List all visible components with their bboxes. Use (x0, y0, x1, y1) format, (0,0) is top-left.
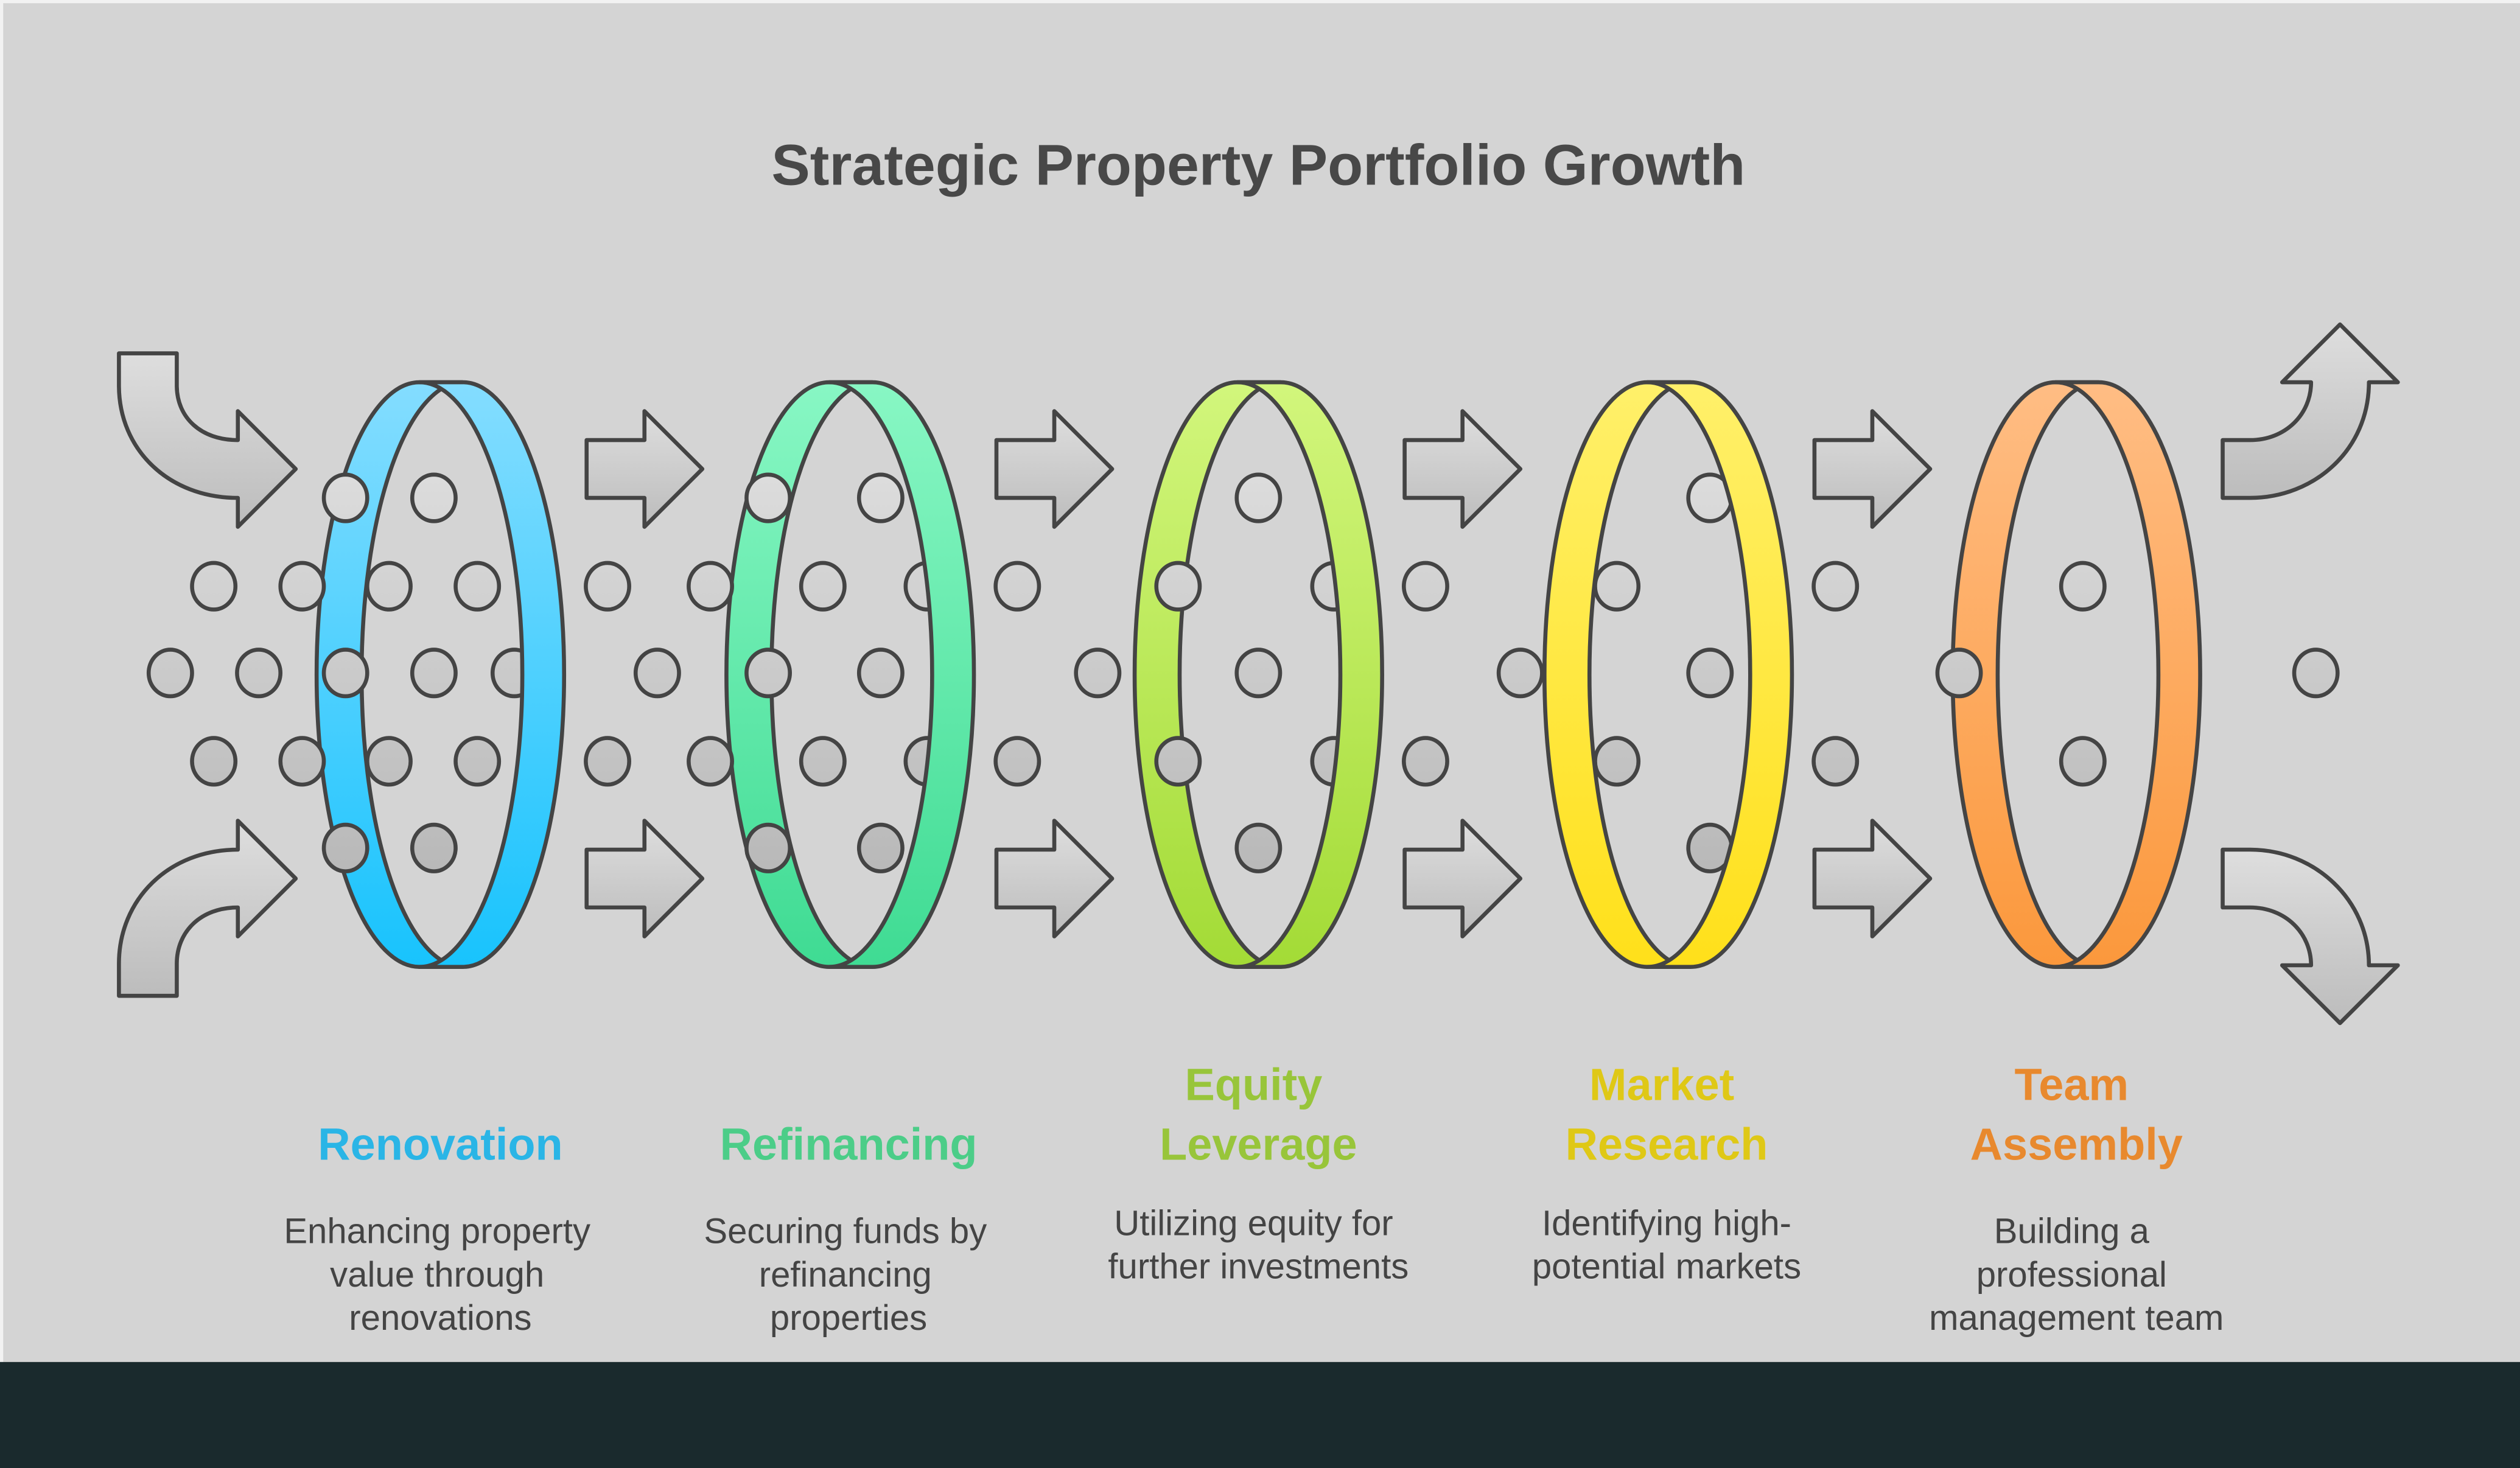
label: Team Assembly: Team (2015, 1060, 2129, 1110)
label: Refinancing: properties (770, 1298, 927, 1338)
icon: curved output arrow bottom (2223, 850, 2398, 1023)
label: Refinancing (704, 1119, 987, 1338)
title: Strategic Property Portfolio Growth (771, 133, 1745, 197)
label: Team Assembly: professional (1976, 1255, 2167, 1295)
ring right bands (419, 382, 2200, 967)
label: Equity Leverage: Leverage (1160, 1119, 1357, 1169)
label: Team Assembly: management team (1929, 1298, 2224, 1338)
icon: curved input arrow bottom (119, 821, 296, 996)
ring left bands (317, 382, 2099, 967)
label: Team Assembly: Building a (1994, 1212, 2150, 1251)
dots flowing through rings (149, 475, 2337, 872)
label: Market Research: Identifying high- (1542, 1203, 1791, 1243)
label: Refinancing: refinancing (759, 1255, 932, 1295)
label: Team Assembly (1929, 1060, 2224, 1338)
label: Equity Leverage (1108, 1060, 1409, 1287)
label: Market Research (1532, 1060, 1801, 1287)
label: Renovation: value through (330, 1255, 544, 1295)
label: Renovation: Enhancing property (284, 1212, 590, 1251)
label: Renovation: Renovation (318, 1119, 563, 1169)
label: Market Research: Research (1566, 1119, 1768, 1169)
label: Refinancing: Refinancing (720, 1119, 978, 1169)
label: Market Research: Market (1589, 1060, 1734, 1110)
footer bar (0, 1362, 2520, 1468)
straight arrows between rings (587, 411, 1930, 937)
label: Renovation (284, 1119, 590, 1338)
label: Team Assembly: Assembly (1970, 1119, 2183, 1169)
icon: curved input arrow top (119, 354, 296, 527)
label: Refinancing: Securing funds by (704, 1212, 987, 1251)
label: Equity Leverage: further investments (1108, 1247, 1409, 1287)
label: Equity Leverage: Utilizing equity for (1114, 1203, 1393, 1243)
label: Renovation: renovations (349, 1298, 532, 1338)
icon: curved output arrow top (2223, 324, 2398, 498)
label: Equity Leverage: Equity (1185, 1060, 1322, 1110)
label: Market Research: potential markets (1532, 1247, 1801, 1287)
